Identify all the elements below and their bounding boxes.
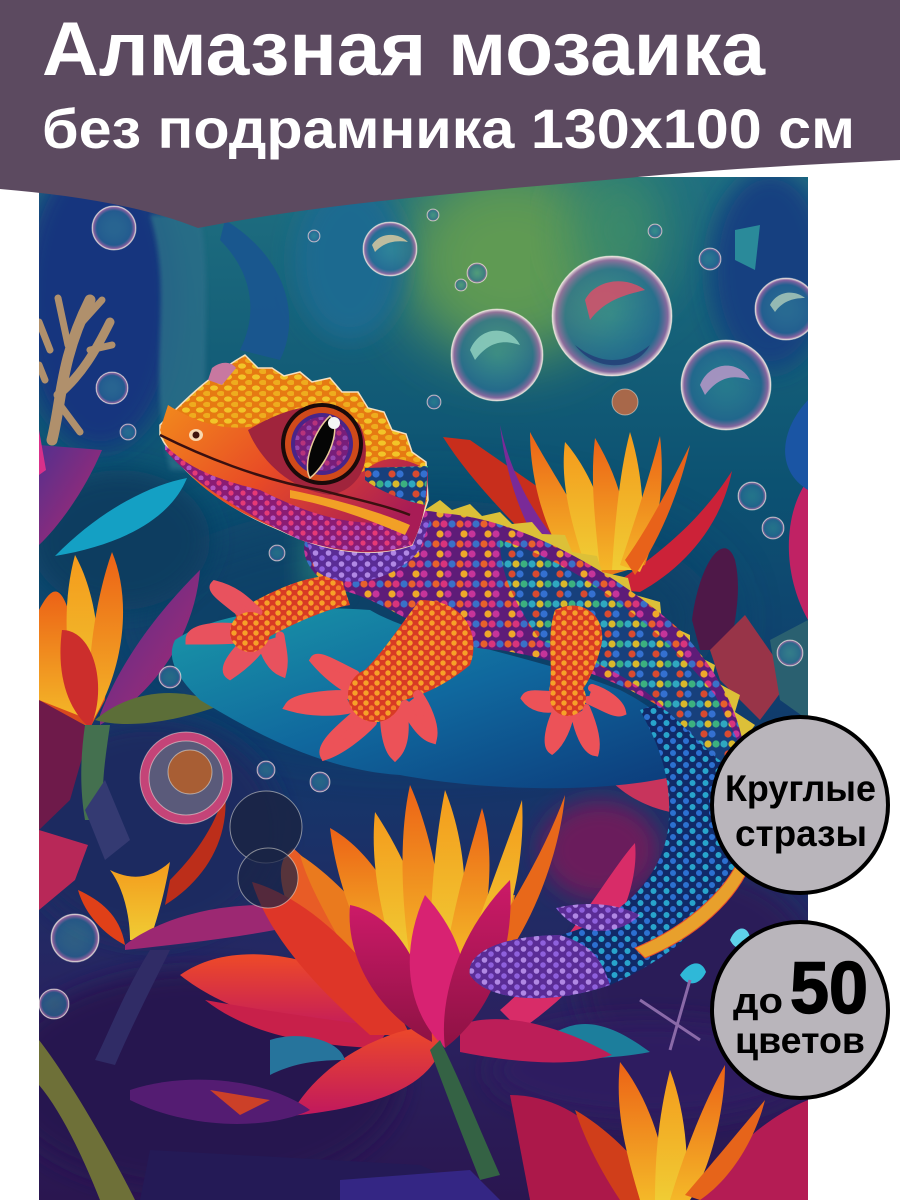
gecko: body rainbow flank xyxy=(500,540,745,770)
badge: up to 50 colours: цветов xyxy=(735,1020,865,1061)
title xyxy=(42,7,855,160)
gecko: tail xyxy=(470,705,752,998)
badge: up to 50 colours: 50 xyxy=(790,948,868,1029)
title: Алмазная мозаика xyxy=(42,7,766,92)
flower: left xyxy=(39,552,222,830)
gecko: rear leg and foot xyxy=(525,606,622,752)
badge: up to 50 colours xyxy=(712,922,888,1098)
gecko: head xyxy=(160,355,428,552)
flower: small left xyxy=(39,780,275,1065)
gecko: throat xyxy=(305,520,430,582)
badge: round rhinestones: стразы xyxy=(735,813,867,854)
gecko: front left leg and foot xyxy=(190,575,350,675)
gecko: body xyxy=(304,510,742,740)
badge: round rhinestones: Круглые xyxy=(725,768,876,809)
badge: up to 50 colours: до xyxy=(733,980,783,1021)
left leaves xyxy=(39,430,187,556)
flower: big centre xyxy=(180,785,650,1180)
flower: bottom right xyxy=(510,1062,808,1200)
badge: round rhinestones xyxy=(712,717,888,893)
gecko xyxy=(160,355,755,998)
lily pad xyxy=(172,608,687,788)
title: без подрамника 130х100 см xyxy=(42,97,855,160)
bubbles xyxy=(39,206,817,1019)
right background plants xyxy=(610,400,808,815)
gecko: front right leg and foot xyxy=(290,600,473,755)
bottom dark foliage xyxy=(39,928,750,1200)
bubble highlights xyxy=(372,235,805,395)
header banner xyxy=(0,0,900,228)
flower: top right xyxy=(443,425,732,592)
gecko: dorsal spikes xyxy=(425,500,755,745)
coral on the left xyxy=(39,298,112,440)
gecko: eye xyxy=(281,403,363,485)
